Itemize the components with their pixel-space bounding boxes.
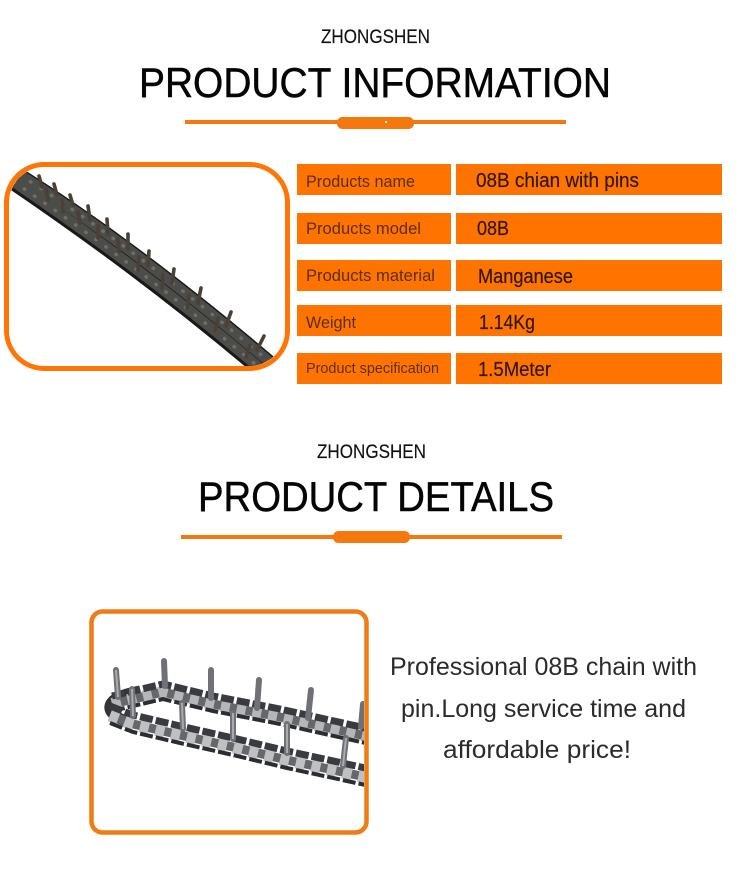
pins bbox=[39, 176, 264, 357]
chain body bbox=[14, 175, 285, 382]
row: products model: Products model bbox=[306, 219, 421, 238]
row: products material bbox=[297, 260, 722, 291]
back strand bbox=[112, 684, 370, 744]
row: products name: Products name bbox=[306, 172, 415, 191]
divider with pill bbox=[185, 117, 566, 129]
loop end bbox=[110, 691, 140, 723]
row: products name bbox=[297, 164, 722, 195]
row: products material: Manganese bbox=[478, 266, 573, 288]
description text: pin.Long service time and bbox=[401, 695, 686, 723]
row: product specification: 1.5Meter bbox=[478, 359, 551, 381]
divider with pill bbox=[181, 531, 562, 543]
row: products name: 08B chian with pins bbox=[476, 170, 639, 192]
product photo: chain loop with pins bbox=[92, 612, 370, 832]
spec table bbox=[297, 164, 722, 384]
row: products model bbox=[297, 213, 722, 244]
photo frame bbox=[92, 612, 366, 832]
description text: affordable price! bbox=[443, 736, 631, 764]
brand label: ZHONGSHEN bbox=[317, 441, 426, 463]
row: products material: Products material bbox=[306, 266, 435, 285]
section header: product information bbox=[139, 26, 611, 129]
pins bbox=[116, 661, 363, 766]
front strand bbox=[110, 706, 370, 786]
title: PRODUCT DETAILS bbox=[198, 473, 554, 520]
row: weight bbox=[297, 305, 722, 336]
description text bbox=[390, 653, 697, 764]
title: PRODUCT INFORMATION bbox=[139, 59, 611, 106]
row: products model: 08B bbox=[477, 218, 509, 240]
description text: Professional 08B chain with bbox=[390, 653, 697, 681]
row: product specification: Product specification bbox=[306, 360, 439, 377]
row: weight: 1.14Kg bbox=[479, 312, 535, 334]
brand label: ZHONGSHEN bbox=[321, 26, 430, 48]
product photo: chain with pins, diagonal bbox=[6, 164, 288, 382]
row: product specification bbox=[297, 353, 722, 384]
section header: product details bbox=[181, 441, 562, 543]
pin highlights bbox=[116, 670, 346, 766]
row: weight: Weight bbox=[306, 313, 356, 332]
photo frame bbox=[6, 164, 288, 368]
